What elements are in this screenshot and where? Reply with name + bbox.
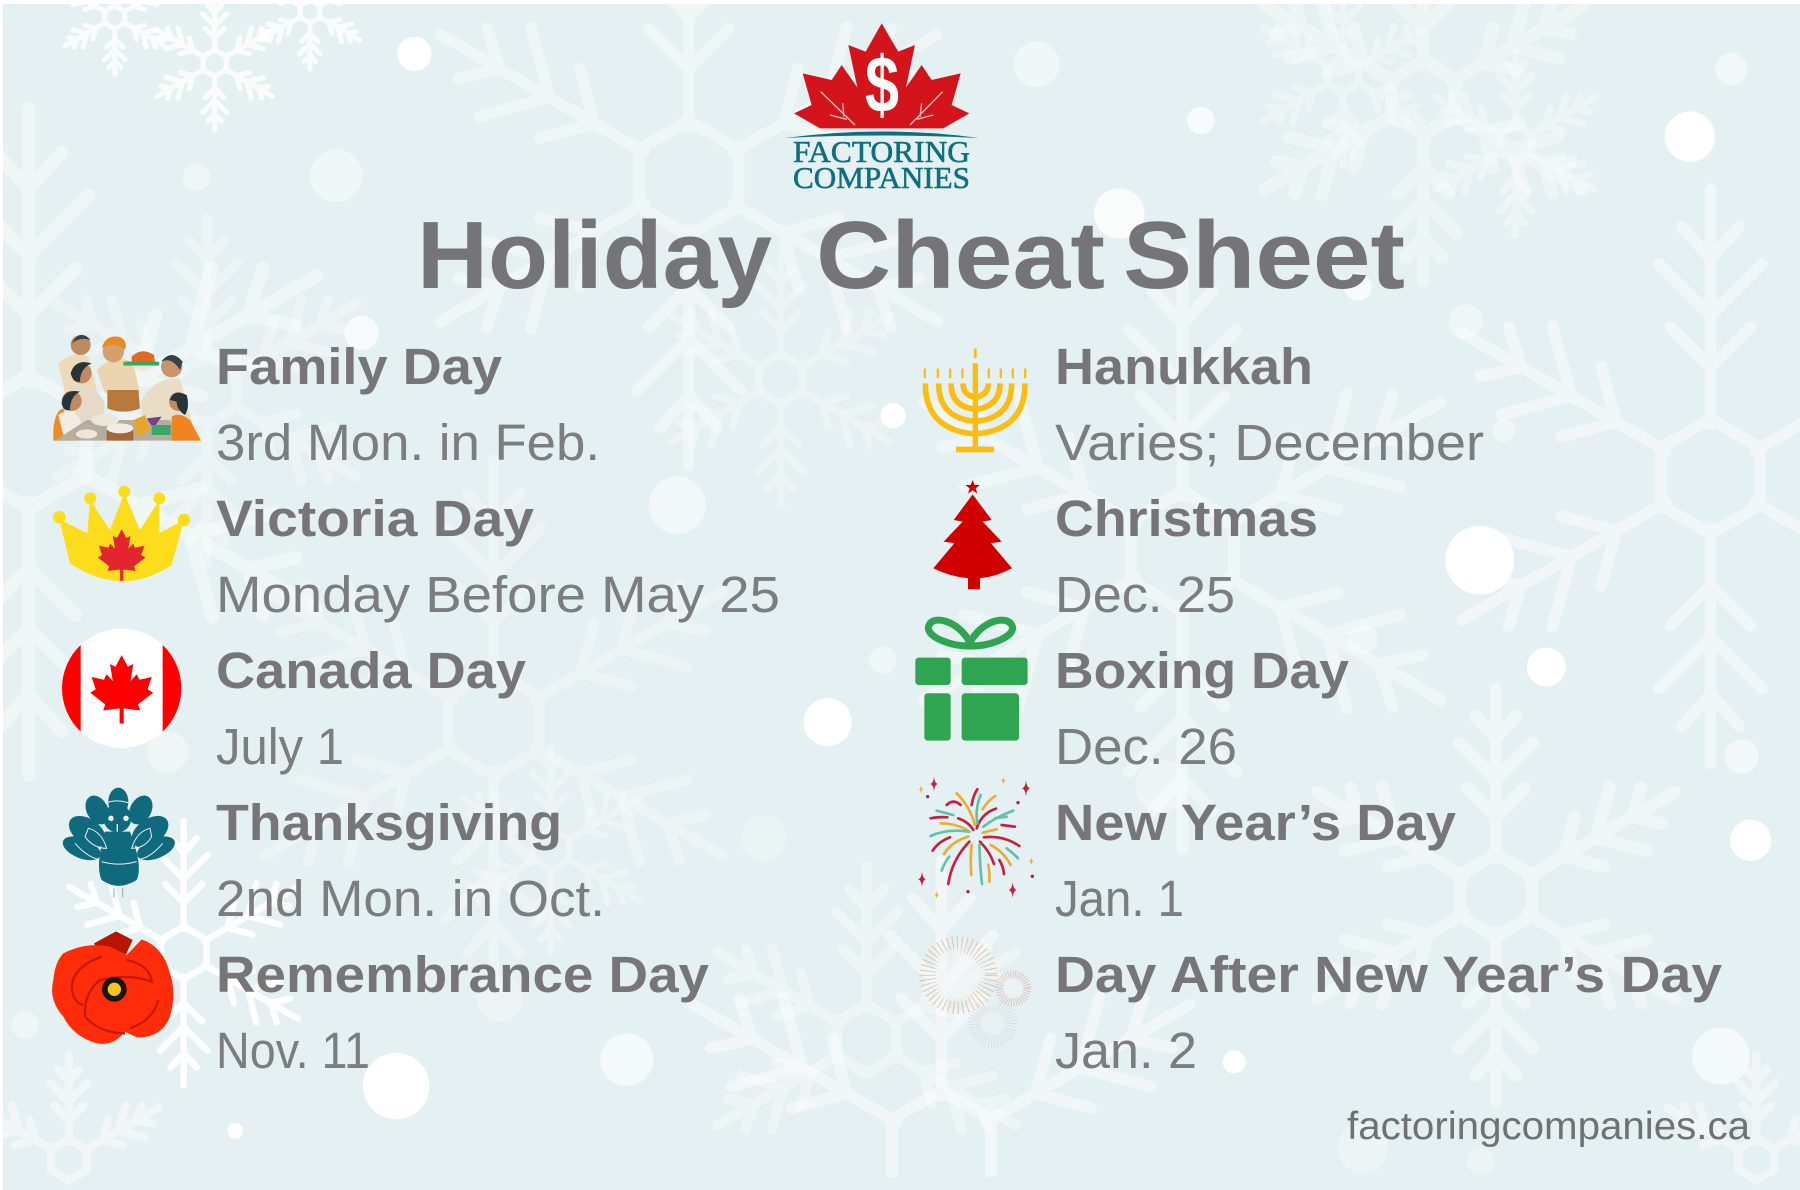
dollar sign: $: [865, 40, 899, 129]
icon: Canadian flag: [62, 629, 181, 748]
right column: holidays: [1055, 338, 1723, 1079]
New Year's Day: New Year’s Day: [1055, 794, 1457, 851]
Thanksgiving: 2nd Mon. in Oct.: [216, 870, 605, 927]
icon: colourful fireworks: [918, 776, 1034, 899]
leaf veins: [821, 92, 943, 125]
Family Day: Family Day: [216, 338, 503, 395]
icon: gift box: [915, 620, 1028, 741]
New Year's Day: Jan. 1: [1055, 870, 1184, 927]
title: Cheat: [816, 202, 1105, 309]
logo wordmark: [793, 134, 970, 195]
title: Sheet: [1123, 202, 1405, 309]
icon: poppy: [52, 931, 173, 1044]
Christmas: Christmas: [1055, 490, 1318, 547]
icon: turkey: [59, 788, 178, 897]
logo: Factoring Companies: [785, 23, 979, 195]
Victoria Day: [216, 490, 780, 623]
Victoria Day: Victoria Day: [216, 490, 535, 547]
logo wordmark: COMPANIES: [793, 160, 970, 195]
Remembrance Day: Remembrance Day: [216, 946, 710, 1003]
New Year's Day: [1055, 794, 1457, 927]
Boxing Day: Boxing Day: [1055, 642, 1350, 699]
Hanukkah: Varies; December: [1055, 414, 1484, 471]
Canada Day: Canada Day: [216, 642, 527, 699]
Christmas: Dec. 25: [1055, 566, 1235, 623]
Day After New Year's Day: Jan. 2: [1055, 1022, 1197, 1079]
icon: family dinner: [53, 335, 201, 441]
icon: menorah: [924, 348, 1026, 452]
teal arc: [785, 132, 979, 138]
Hanukkah: Hanukkah: [1055, 338, 1313, 395]
left column: holidays: [216, 338, 780, 1079]
Family Day: 3rd Mon. in Feb.: [216, 414, 600, 471]
Day After New Year's Day: [1055, 946, 1723, 1079]
Christmas: [1055, 490, 1318, 623]
Canada Day: July 1: [216, 718, 344, 775]
icon: red maple leaf: [794, 23, 969, 128]
Remembrance Day: Nov. 11: [216, 1022, 370, 1079]
Thanksgiving: [216, 794, 605, 927]
Boxing Day: Dec. 26: [1055, 718, 1237, 775]
footer website: factoringcompanies.ca: [1347, 1105, 1750, 1148]
Family Day: [216, 338, 600, 471]
Day After New Year's Day: Day After New Year’s Day: [1055, 946, 1723, 1003]
Remembrance Day: [216, 946, 710, 1079]
Thanksgiving: Thanksgiving: [216, 794, 562, 851]
title: [417, 202, 1405, 309]
title: Holiday: [417, 202, 772, 309]
icon: pale fireworks: [928, 944, 1027, 1042]
Victoria Day: Monday Before May 25: [216, 566, 780, 623]
icon: crown: [53, 486, 190, 581]
Hanukkah: [1055, 338, 1484, 471]
Boxing Day: [1055, 642, 1350, 775]
logo wordmark: FACTORING: [793, 134, 970, 169]
Canada Day: [216, 642, 527, 775]
icon: Christmas tree: [933, 480, 1012, 589]
